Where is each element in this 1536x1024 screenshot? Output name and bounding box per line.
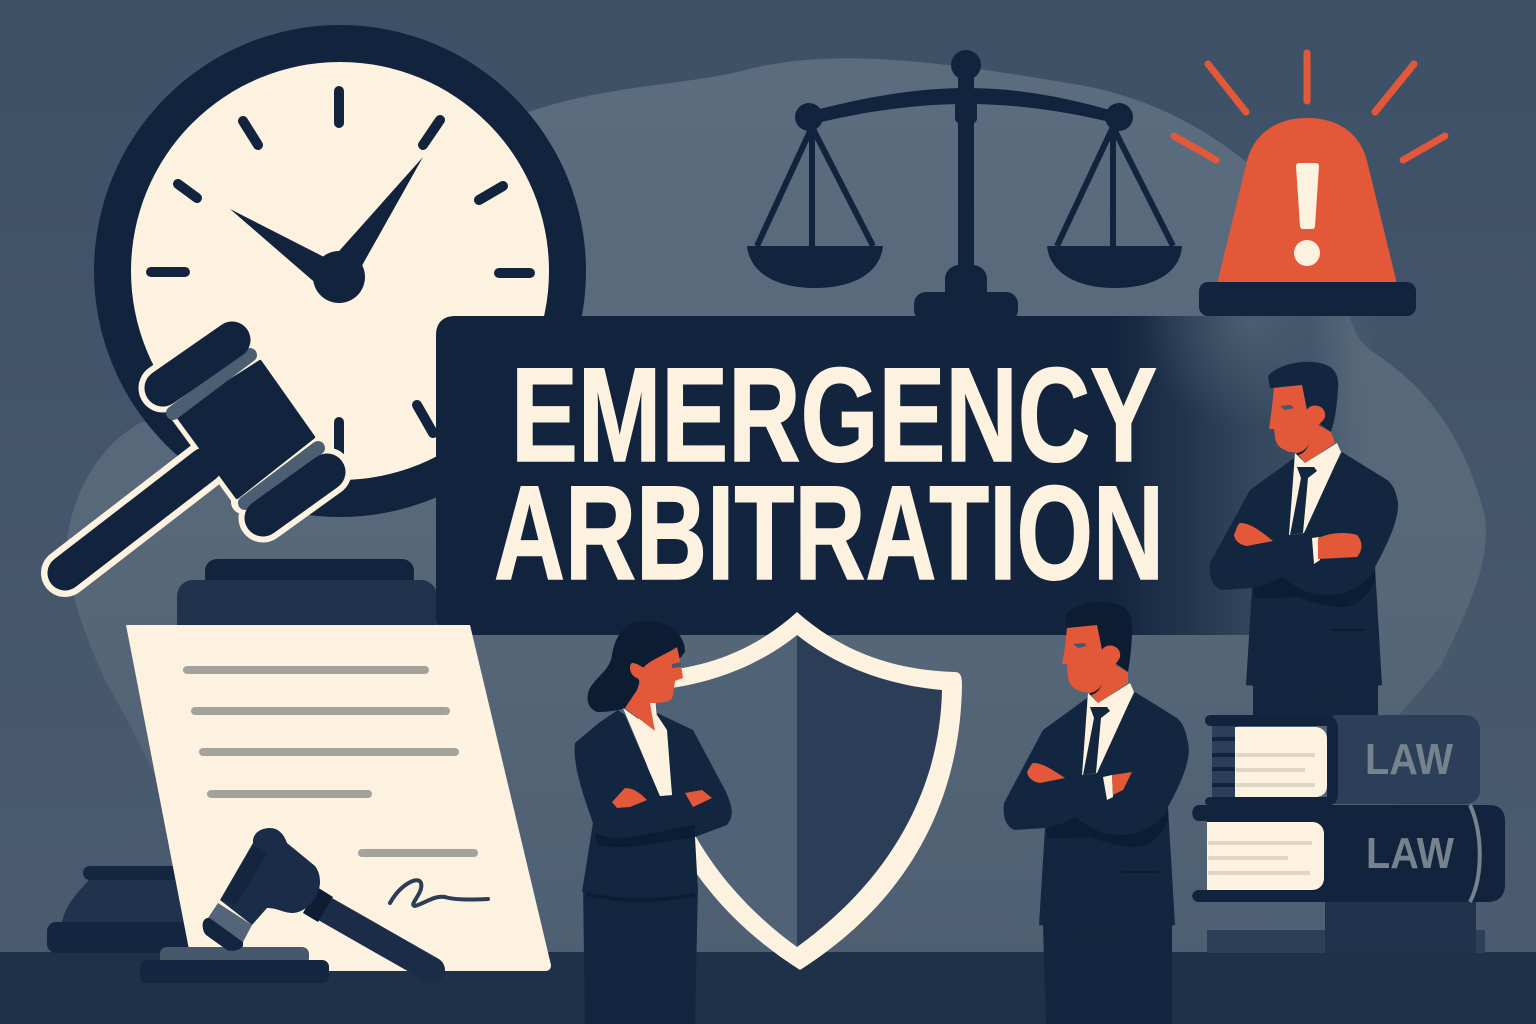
figure: woman [575,621,732,1024]
icon: small gavel [140,828,432,983]
title: ARBITRATION [494,459,1164,608]
icon: clock [94,25,586,517]
title banner [436,316,1380,635]
icon: shield [636,612,962,970]
upper book [1205,715,1480,806]
icon: law books [1192,715,1505,953]
pedestal [1207,900,1485,953]
icon: scales of justice [747,50,1182,322]
icon: alarm siren [1174,53,1445,316]
title [494,341,1164,608]
figure: man centre [1004,602,1189,1024]
lower book [1192,805,1505,902]
icon: large gavel [65,340,327,573]
title: EMERGENCY [511,341,1157,490]
figure: man right [1210,362,1398,720]
LAW labels [1365,735,1454,878]
gavel base [177,559,437,640]
book stack left [47,866,197,953]
LAW labels: LAW [1365,735,1453,784]
icon: document [126,625,551,971]
LAW labels: LAW [1366,829,1454,878]
